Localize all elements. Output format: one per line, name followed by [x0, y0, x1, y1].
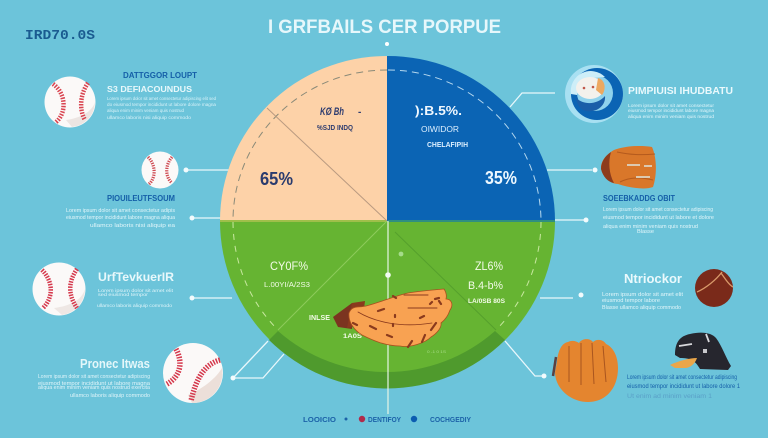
text block: ball 3: UrfTevkuerIR [98, 270, 174, 284]
text block: ball 3 [97, 270, 174, 308]
text block: ball 4: aliqua enim minim veniam quis nostrud exercita [38, 385, 150, 391]
text block: glove: Lorem ipsum dolor sit amet consectetur adipiscing [603, 207, 713, 213]
text block: ball 4: eiusmod tempor incididunt ut labore magna [38, 381, 150, 387]
pie labels: L.00YI/A/2S3 [264, 280, 310, 289]
pie labels: CHELAFIPIH [427, 142, 468, 149]
pie labels: OIWIDOR [421, 124, 459, 134]
text block: ball 2: eiusmod tempor incididunt labore magna aliqua [66, 215, 175, 221]
text block: ball 2: Lorem ipsum dolor sit amet consectetur adipis [66, 208, 176, 214]
text block: glove: Blasse [637, 229, 654, 235]
text block: cap: eiusmod tempor incididunt ut labore dolore 1 [627, 384, 741, 390]
pie labels: LA/0SB 80S [468, 298, 506, 305]
text block: ball 2: PIOUILEUTFSOUM [107, 194, 175, 203]
text block: ball 4: Lorem ipsum dolor sit amet consectetur adipiscing [38, 374, 150, 380]
text block: badge: Lorem ipsum dolor sit amet consectetur [628, 103, 715, 108]
text block: ball 1: ullamco laboris nisi aliquip commodo [107, 115, 192, 120]
pie labels [260, 104, 517, 340]
icon: large orange mitt [553, 339, 618, 402]
text block: glove [603, 194, 714, 235]
baseball 2 [142, 152, 178, 188]
segment: green [220, 221, 555, 388]
icon: orange glove top right [601, 146, 656, 188]
text block: ball 1 [107, 71, 216, 120]
icon: blue circular badge [565, 65, 623, 123]
text block: badge: eiusmod tempor incididunt labore magna [628, 108, 715, 113]
text block: brown ball [602, 272, 684, 311]
legend: LOOICIO [303, 417, 337, 424]
segment: peach 65% [220, 56, 387, 221]
pie labels: KØ Bh [320, 106, 344, 118]
text block: ball 3: Lorem ipsum dolor sit amet elit [98, 288, 174, 293]
text block: glove: aliqua enim minim veniam quis nostrud [603, 224, 698, 230]
text block: ball 4: ullamco laboris aliquip commodo [70, 393, 150, 399]
text block: cap: Ut enim ad minim veniam 1 [627, 394, 713, 400]
legend: COCHGEDIY [430, 417, 471, 424]
pie labels: 1A0S [343, 333, 363, 340]
pie labels: - [358, 107, 361, 118]
text block: badge: aliqua enim minim veniam quis nostrud [628, 114, 715, 119]
pie chart [220, 56, 555, 414]
icon: center glove [333, 289, 452, 347]
text block: cap [627, 375, 741, 400]
pie labels: ):B.5%. [415, 104, 462, 118]
icon: black cap [670, 333, 731, 370]
text block: ball 1: aliqua enim minim veniam quis nostrud [107, 108, 184, 113]
text block: ball 1: Lorem ipsum dolor sit amet consectetur adipiscing elit sed [107, 96, 216, 101]
top-left label: IRD70.0S [25, 28, 95, 44]
icon: brown ball [695, 269, 733, 307]
pie labels: 65% [260, 169, 293, 189]
dashed inner ring [233, 70, 387, 221]
pie labels: 35% [485, 168, 517, 188]
text block: badge: PIMPIUISI IHUDBATU [628, 85, 733, 97]
pie labels: INLSE [309, 315, 330, 322]
baseball 3 [32, 262, 86, 316]
text block: brown ball: eiusmod tempor labore [602, 298, 660, 304]
baseball 1 [44, 76, 96, 128]
pie chart: 0 -1 0 1S [427, 349, 446, 354]
text block: ball 1: DATTGGOR LOUPT [123, 71, 197, 80]
text block: ball 1: do eiusmod tempor incididunt ut labore dolore magna [107, 102, 216, 107]
pie labels: ZL6% [475, 259, 503, 273]
text block: brown ball: Ntriockor [624, 272, 682, 286]
text block: brown ball: Blasse ullamco aliquip commodo [602, 305, 681, 311]
legend [303, 416, 471, 424]
baseball 4 [163, 343, 223, 403]
connector lines [184, 93, 598, 380]
text block: ball 3: ullamco laboris aliquip commodo [97, 303, 173, 308]
text block: brown ball: Lorem ipsum dolor sit amet elit [602, 292, 684, 298]
text block: ball 2: ullamco laboris nisi aliquip ea [90, 223, 175, 229]
text block: cap: Lorem ipsum dolor sit amet consectetur adipiscing [627, 375, 737, 381]
text block: ball 2 [66, 194, 176, 229]
text block: ball 4 [38, 357, 150, 399]
legend: DENTIFOY [368, 417, 401, 424]
text block: glove: SOEEBKADDG OBIT [603, 194, 675, 203]
pie labels: %SJD INDQ [317, 123, 353, 132]
segment: blue 35% [387, 56, 555, 221]
title: I GRFBAILS CER PORPUE [268, 16, 501, 38]
text block: glove: eiusmod tempor incididunt ut labore et dolore [603, 215, 714, 221]
text block: ball 4: Pronec Itwas [80, 357, 150, 371]
outer dark green band [269, 331, 505, 388]
text block: badge [628, 85, 733, 119]
pie labels: B.4-b% [468, 280, 503, 292]
text block: ball 1: S3 DEFIACOUNDUS [107, 84, 192, 94]
text block: ball 3: sed eiusmod tempor [98, 292, 149, 297]
pie labels: CY0F% [270, 259, 308, 273]
